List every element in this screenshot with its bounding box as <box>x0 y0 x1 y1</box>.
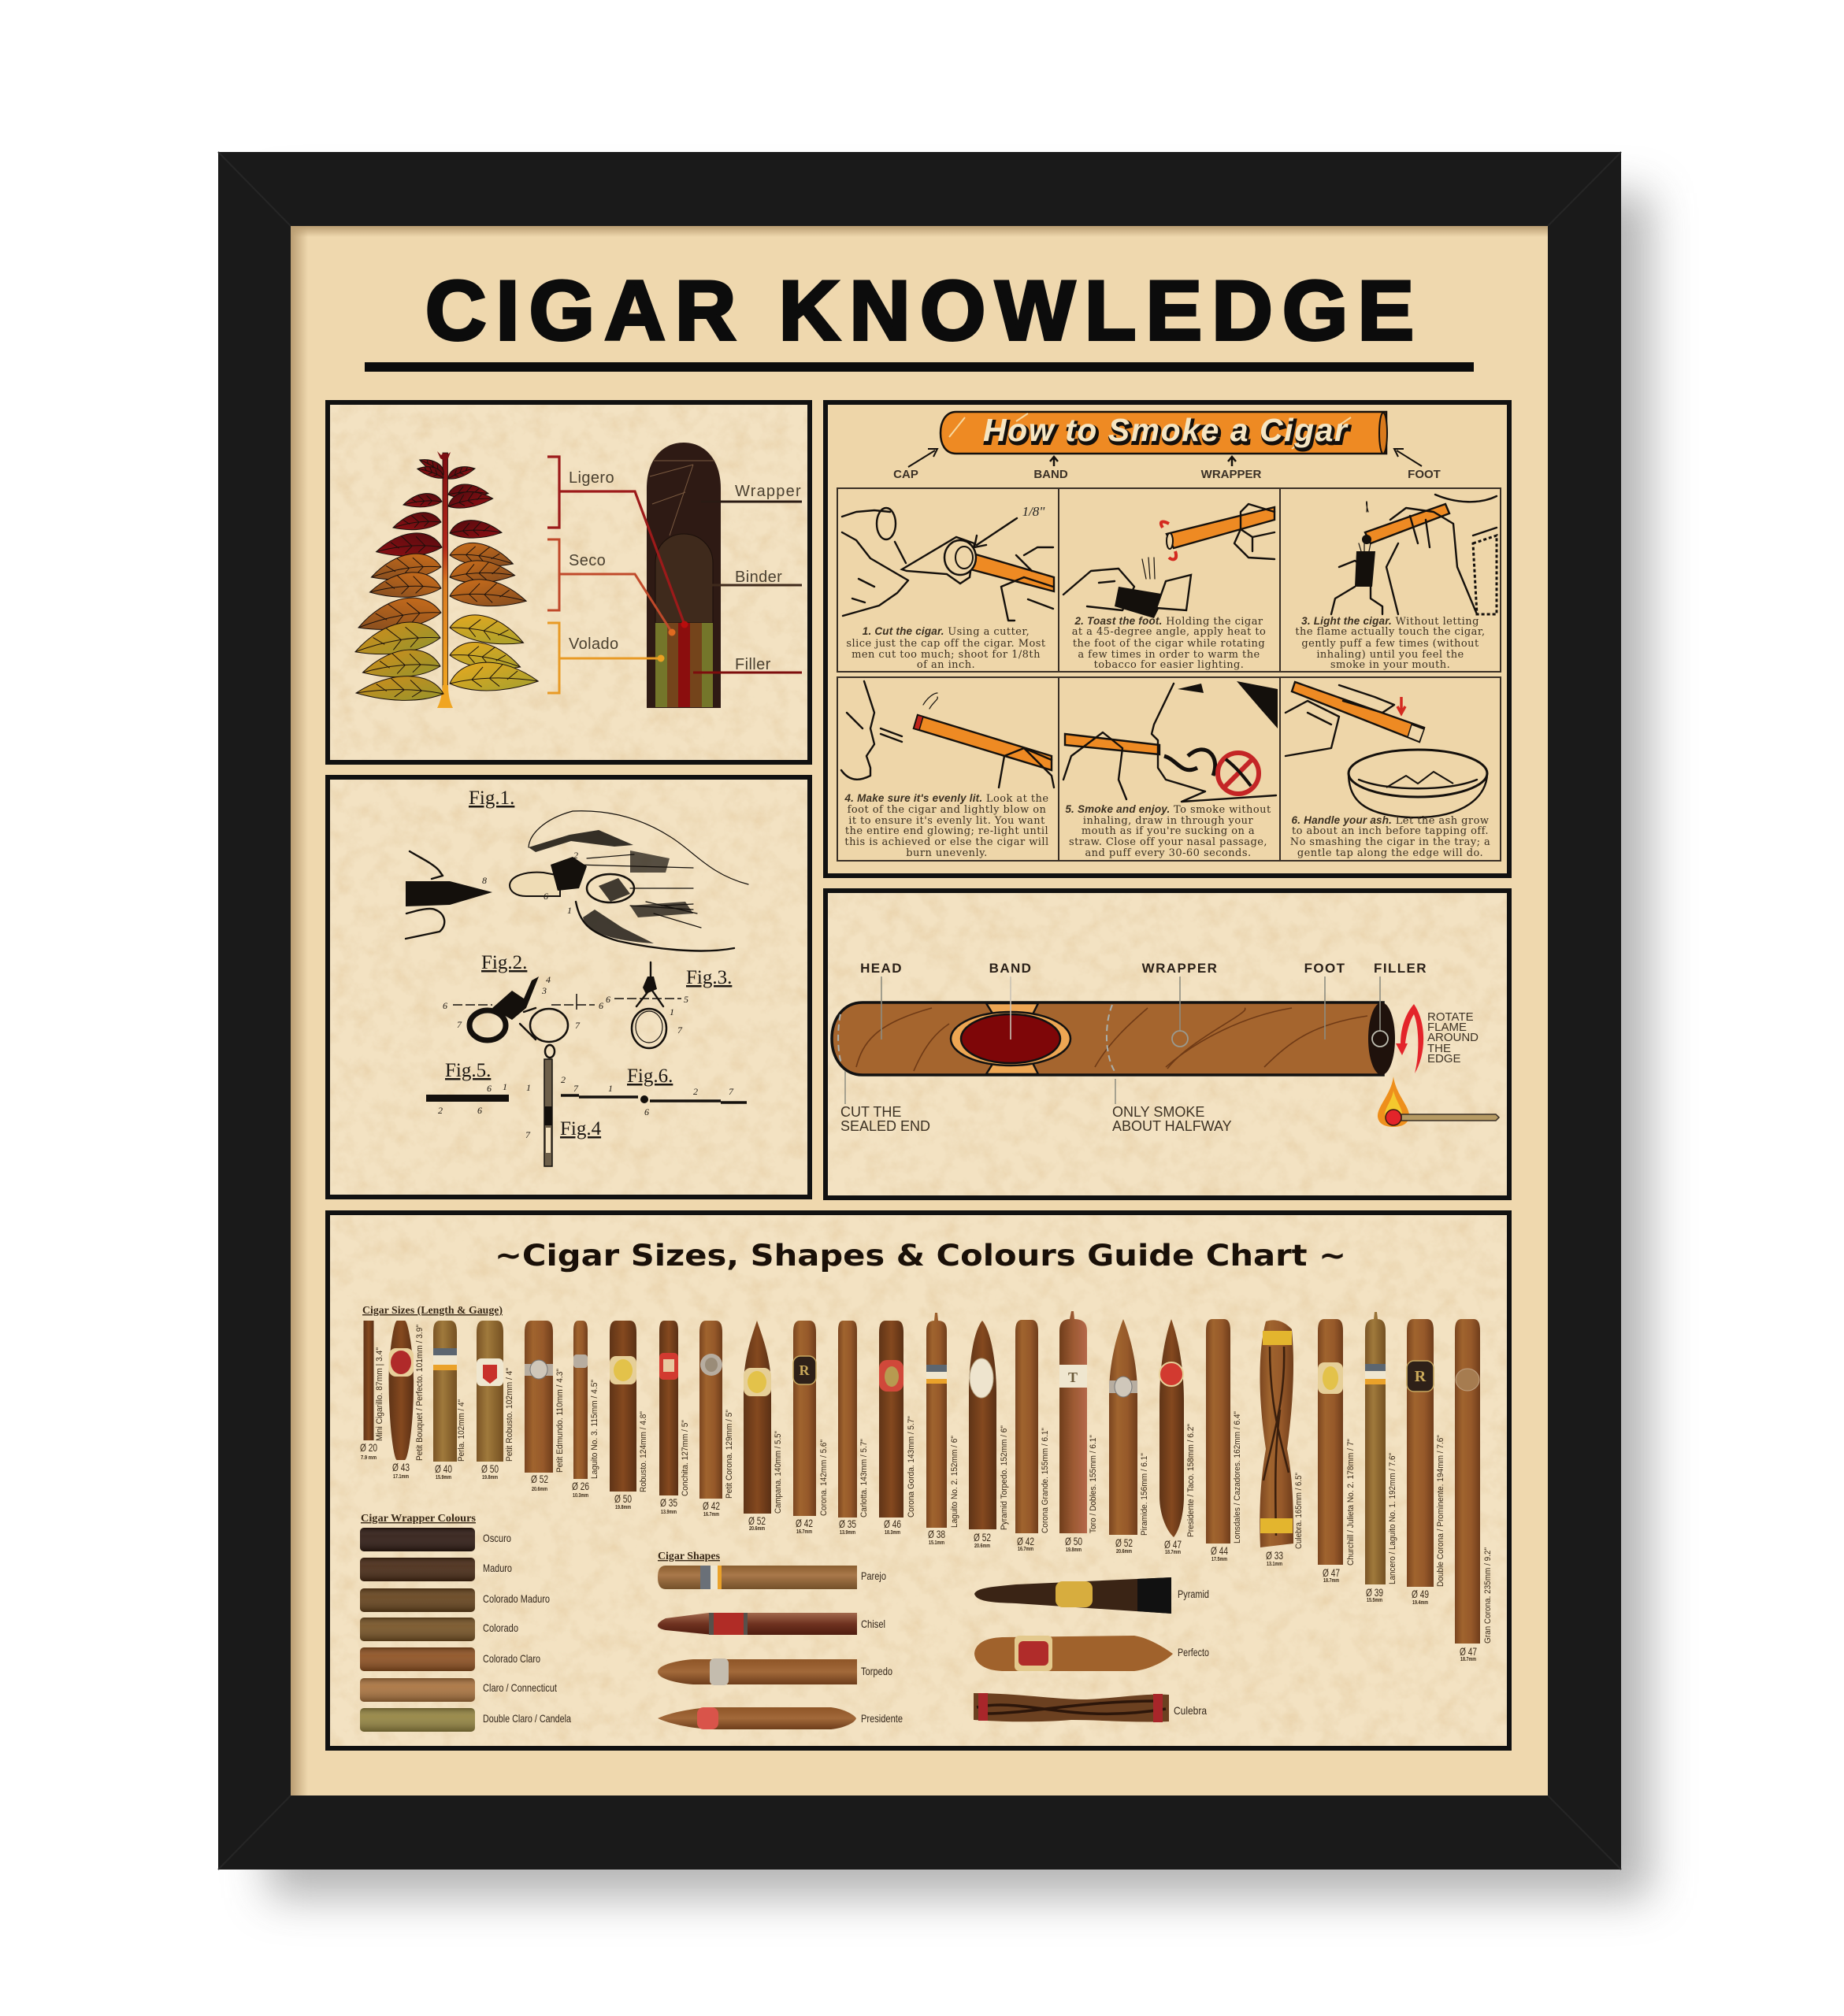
cigar: toro: 19.8mm <box>1066 1547 1082 1553</box>
cigar: toro: Toro / Dobles. 155mm / 6.1" <box>1089 1435 1098 1533</box>
label: wrapper with arrow <box>1201 457 1262 481</box>
cigar: robusto: Robusto. 124mm / 4.8" <box>639 1411 648 1492</box>
shape: pyramid <box>974 1577 1209 1614</box>
cigar: mini cigarillo: 7.9 mm <box>361 1455 377 1461</box>
banner: how to smoke a cigar: How to Smoke a Cigar <box>985 414 1350 450</box>
figure 2: cutter open: 6 <box>443 1000 447 1011</box>
label: Binder: Binder <box>735 569 782 586</box>
cigar: petit robusto: 19.8mm <box>482 1475 498 1480</box>
step 5: smoke and enjoy: mouth as if you're sucking on a <box>1082 825 1255 837</box>
figure 1: hands with cigar and cutter: 2 <box>573 850 578 861</box>
callout: head: HEAD <box>860 961 903 976</box>
figure 2: cutter open: 7 <box>575 1020 581 1031</box>
diagram: cigar body <box>832 1002 1395 1075</box>
bracket: Volado: Volado <box>569 636 619 653</box>
figure 5: cutter section: 6 <box>487 1083 492 1094</box>
shape: parejo <box>658 1566 886 1589</box>
cigar: laguito no. 2: Laguito No. 2. 152mm / 6" <box>950 1436 959 1528</box>
shape: torpedo <box>658 1658 892 1685</box>
cigar: perla: 15.9mm <box>436 1475 451 1480</box>
cigar: lancero <box>1365 1312 1397 1603</box>
cigar: churchill: Churchill / Julieta No. 2. 178mm / 7" <box>1346 1439 1356 1566</box>
figure 6: cutter long section: 7 <box>573 1083 579 1094</box>
figure 5: cutter section <box>426 1060 509 1116</box>
step 6: handle your ash: No smashing the cigar in the tray; a <box>1290 836 1490 848</box>
cigar: pyramid torpedo: Pyramid Torpedo. 152mm / 6" <box>1000 1425 1009 1530</box>
figure 1: hands with cigar and cutter: Fig.1. <box>469 788 514 809</box>
cigar: campana: 20.6mm <box>749 1526 765 1532</box>
cigar: laguito no. 2: 15.1mm <box>929 1540 944 1546</box>
figure 4: cutter edge view: 7 <box>525 1129 531 1140</box>
shape: perfecto <box>974 1636 1209 1671</box>
arrow: rotate flame <box>1396 1004 1479 1073</box>
step 2: toast the foot: tobacco for easier lighting. <box>1094 659 1244 671</box>
label: cap with arrow: CAP <box>893 468 918 481</box>
cigar: culebra: Culebra. 165mm / 6.5" <box>1294 1473 1304 1549</box>
cigar: presidente: 18.7mm <box>1165 1550 1181 1555</box>
figure 6: cutter long section: 7 <box>729 1086 734 1097</box>
cigar: carlotta <box>838 1321 869 1536</box>
cigar: corona grande: Corona Grande. 155mm / 6.1" <box>1041 1428 1050 1533</box>
cigar: campana <box>744 1321 783 1532</box>
cigar: petit corona: 16.7mm <box>703 1512 719 1518</box>
label: cap with arrow <box>893 449 937 481</box>
figure 2: cutter open: 4 <box>546 974 551 985</box>
cigar: piramide: Ø 52 <box>1115 1536 1133 1549</box>
heading: guide chart: ~Cigar Sizes, Shapes & Colours Guide Chart ~ <box>495 1239 1346 1273</box>
cigar: piramide: Piramide. 156mm / 6.1" <box>1140 1453 1149 1536</box>
cigar: petit corona: Ø 42 <box>703 1499 720 1512</box>
panel: cigar sizes, shapes and colours guide chart <box>328 1213 1509 1748</box>
panel: how to smoke a cigar <box>826 402 1509 876</box>
cigar: corona gorda: Ø 46 <box>884 1518 901 1530</box>
step 6: handle your ash <box>1280 677 1501 861</box>
panel: tobacco plant and cigar anatomy <box>328 402 810 762</box>
shape: presidente: Presidente <box>861 1712 903 1725</box>
step 4: make sure it's evenly lit: it to ensure it's evenly lit. You want <box>848 815 1045 827</box>
cigar: corona gorda: Corona Gorda. 143mm / 5.7" <box>907 1416 916 1518</box>
cigar: mini cigarillo <box>360 1321 384 1461</box>
cigar: gran corona: 18.7mm <box>1460 1657 1476 1662</box>
figure 2: cutter open: 3 <box>541 985 547 996</box>
step 4: make sure it's evenly lit: the entire end glowing; re-light until <box>845 825 1048 837</box>
step 3: light the cigar: 3. Light the cigar. Without letting <box>1301 615 1479 628</box>
cigar: piramide: 20.6mm <box>1116 1549 1132 1555</box>
step 5: smoke and enjoy: 5. Smoke and enjoy. To smoke without <box>1065 803 1271 816</box>
swatch: colorado maduro: Colorado Maduro <box>483 1592 550 1605</box>
figure 6: cutter long section <box>561 1065 747 1117</box>
paper mat <box>291 226 1548 1796</box>
cigar: presidente <box>1159 1319 1196 1555</box>
cigar: lonsdales: Lonsdales / Cazadores. 162mm / 6.4" <box>1233 1411 1242 1544</box>
cigar: conchita: 13.9mm <box>661 1510 677 1515</box>
cigar: perla: Perla. 102mm / 4" <box>457 1399 466 1462</box>
figure 6: cutter long section: Fig.6. <box>627 1065 673 1087</box>
figure 5: cutter section: 2 <box>438 1105 443 1116</box>
label: band with arrow <box>1033 457 1068 481</box>
banner: how to smoke a cigar: How to Smoke a Cigar <box>983 412 1349 448</box>
figure 5: cutter section: 6 <box>477 1105 482 1116</box>
swatch: colorado <box>360 1618 518 1641</box>
legend: cigar wrapper colours: Cigar Wrapper Colours <box>361 1513 477 1525</box>
legend: cigar shapes: Cigar Shapes <box>658 1551 721 1562</box>
note: only smoke about halfway: ONLY SMOKE <box>1112 1104 1204 1120</box>
swatch: oscuro <box>360 1528 511 1551</box>
callout: foot: FOOT <box>1304 961 1345 976</box>
cigar: churchill <box>1318 1319 1356 1584</box>
figure 6: cutter long section: 1 <box>608 1083 613 1094</box>
figure 5: cutter section: Fig.5. <box>445 1060 491 1081</box>
cigar: petit edmundo <box>525 1321 565 1492</box>
step 2: toast the foot: the foot of the cigar while rotating <box>1073 638 1265 650</box>
cigar: churchill: Ø 47 <box>1323 1566 1340 1579</box>
label: Binder <box>698 569 802 586</box>
cigar: perla: Ø 40 <box>435 1462 452 1475</box>
cigar: laguito no. 2 <box>926 1313 959 1546</box>
figure 6: cutter long section: 6 <box>644 1106 649 1117</box>
icon: burning match <box>1378 1077 1499 1127</box>
cigar: toro: T <box>1068 1369 1078 1385</box>
arrow: rotate flame: FLAME <box>1427 1021 1467 1034</box>
cigar: double corona: Double Corona / Prominente. 194mm / 7.6" <box>1436 1435 1445 1587</box>
title: CIGAR KNOWLEDGE <box>425 263 1414 358</box>
cigar: petit robusto: Petit Robusto. 102mm / 4" <box>505 1368 514 1462</box>
cigar: culebra: Ø 33 <box>1266 1549 1283 1562</box>
cigar: petit bouquet: 17.1mm <box>393 1474 409 1480</box>
cigar: toro: Ø 50 <box>1065 1535 1082 1547</box>
frame drop shadow <box>268 193 1650 1898</box>
shape: culebra <box>974 1693 1207 1722</box>
step 2: toast the foot: a few times in order to warm the <box>1078 649 1260 661</box>
cigar: lancero: 15.5mm <box>1367 1598 1382 1603</box>
figure 4: cutter edge view: Fig.4 <box>560 1118 602 1140</box>
cigar: culebra <box>1260 1320 1304 1567</box>
cigar: corona gorda: 18.3mm <box>885 1530 900 1536</box>
arrow: rotate flame: AROUND <box>1427 1031 1479 1044</box>
figure 4: cutter edge view: 2 <box>561 1074 566 1085</box>
swatch: claro connecticut: Claro / Connecticut <box>483 1681 557 1694</box>
panel: patent drawings of cigar cutter <box>328 777 810 1197</box>
cigar: mini cigarillo: Mini Cigarillo. 87mm | 3.4" <box>375 1347 384 1441</box>
cigar: petit corona <box>699 1321 734 1518</box>
cigar: lonsdales: Ø 44 <box>1211 1544 1228 1557</box>
cigar: conchita <box>659 1321 690 1515</box>
shape: presidente <box>658 1707 903 1729</box>
cigar: corona grande <box>1015 1320 1050 1552</box>
figure 4: cutter edge view: 1 <box>526 1082 531 1093</box>
cigar: carlotta: Carlotta. 143mm / 5.7" <box>859 1439 869 1518</box>
bracket: Seco: Seco <box>569 552 606 569</box>
cigar: lonsdales <box>1206 1319 1242 1562</box>
cigar: petit robusto <box>477 1321 514 1480</box>
figure 2: cutter open: 7 <box>457 1019 462 1030</box>
cigar: petit robusto: Ø 50 <box>481 1462 499 1475</box>
step 5: smoke and enjoy <box>1059 677 1280 861</box>
swatch: oscuro: Oscuro <box>483 1532 511 1544</box>
black frame <box>218 152 1621 1870</box>
step 4: make sure it's evenly lit: 4. Make sure it's evenly lit. Look at the <box>844 792 1049 805</box>
label: Filler <box>693 656 802 673</box>
cigar: petit bouquet <box>389 1321 425 1480</box>
cigar: corona: R <box>799 1362 810 1378</box>
step 1: cut the cigar: 1/8" <box>1022 504 1045 519</box>
step 1: cut the cigar: slice just the cap off the cigar. Most <box>846 638 1046 650</box>
label: Wrapper <box>701 483 802 502</box>
shape: pyramid: Pyramid <box>1178 1588 1209 1600</box>
step 2: toast the foot: 2. Toast the foot. Holding the cigar <box>1074 615 1263 628</box>
shape: parejo: Parejo <box>861 1569 886 1582</box>
cigar: culebra: 13.1mm <box>1267 1562 1282 1567</box>
cigar: corona grande: 16.7mm <box>1018 1547 1033 1552</box>
cigar: campana: Campana. 140mm / 5.5" <box>774 1431 783 1514</box>
figure 3: cutter closed: 5 <box>684 994 688 1005</box>
step 3: light the cigar: gently puff a few times (without <box>1301 638 1479 650</box>
step 1: cut the cigar <box>837 488 1059 672</box>
cigar: lancero: Ø 39 <box>1366 1586 1383 1599</box>
shape: torpedo: Torpedo <box>861 1665 892 1677</box>
cigar: mini cigarillo: Ø 20 <box>360 1441 377 1454</box>
cigar: pyramid torpedo: Ø 52 <box>974 1531 991 1544</box>
icon: cigar cross section <box>647 443 721 708</box>
figure 3: cutter closed: Fig.3. <box>686 967 732 988</box>
callout: foot <box>1304 961 1345 1040</box>
figure 3: cutter closed: 1 <box>670 1006 674 1017</box>
cigar: corona: Ø 42 <box>796 1517 813 1529</box>
callout: band <box>989 961 1032 1040</box>
cigar: double corona: 19.4mm <box>1412 1600 1428 1606</box>
figure 4: cutter edge view <box>525 1045 602 1166</box>
cigar: toro <box>1059 1311 1098 1553</box>
step 5: smoke and enjoy: inhaling, draw in through your <box>1083 815 1253 827</box>
step 3: light the cigar <box>1280 488 1501 672</box>
figure 2: cutter open <box>443 952 603 1042</box>
cigar: corona: Corona. 142mm / 5.6" <box>819 1440 829 1516</box>
cigar: corona gorda <box>879 1321 916 1536</box>
cigar: carlotta: 13.9mm <box>840 1530 855 1536</box>
cigar: lonsdales: 17.5mm <box>1211 1557 1227 1562</box>
cigar: pyramid torpedo: 20.6mm <box>974 1544 990 1549</box>
swatch: colorado maduro <box>360 1588 550 1612</box>
step 3: light the cigar: the flame actually touch the cigar, <box>1295 626 1486 638</box>
cigar: petit bouquet: Ø 43 <box>392 1461 410 1473</box>
bracket: Seco <box>547 539 676 636</box>
step 6: handle your ash: 6. Handle your ash. Let the ash grow <box>1292 814 1489 827</box>
cigar: robusto <box>610 1321 648 1510</box>
cigar: corona: 16.7mm <box>796 1529 812 1535</box>
shape: perfecto: Perfecto <box>1178 1646 1209 1658</box>
note: only smoke about halfway <box>1112 1079 1232 1134</box>
callout: band: BAND <box>989 961 1032 976</box>
callout: filler <box>1372 961 1427 1047</box>
label: wrapper with arrow: WRAPPER <box>1201 468 1262 481</box>
step 6: handle your ash: to about an inch before tapping off. <box>1292 825 1489 837</box>
cigar: double corona: Ø 49 <box>1412 1588 1429 1600</box>
step 6: handle your ash: gentle tap along the edge will do. <box>1297 847 1483 859</box>
cigar: carlotta: Ø 35 <box>839 1518 856 1530</box>
cigar: laguito no. 2: Ø 38 <box>928 1528 945 1540</box>
cigar: petit edmundo: Petit Edmundo. 110mm / 4.3" <box>555 1369 565 1473</box>
bracket: Volado <box>547 623 665 693</box>
panel: cigar parts and lighting diagram <box>826 891 1509 1198</box>
cigar: laguito no. 3 <box>572 1321 599 1499</box>
arrow: rotate flame: THE <box>1427 1042 1451 1055</box>
note: only smoke about halfway: ABOUT HALFWAY <box>1112 1118 1232 1134</box>
cigar: churchill: 18.7mm <box>1323 1578 1339 1584</box>
cigar: corona <box>793 1321 829 1535</box>
cigar: double corona <box>1407 1319 1445 1606</box>
cigar: pyramid torpedo <box>969 1321 1009 1549</box>
step 3: light the cigar: inhaling) until you feel the <box>1316 649 1464 661</box>
note: cut the sealed end: CUT THE <box>840 1104 901 1120</box>
step 3: light the cigar: smoke in your mouth. <box>1330 659 1450 671</box>
swatch: colorado claro: Colorado Claro <box>483 1652 540 1665</box>
swatch: maduro <box>360 1558 512 1581</box>
cigar: gran corona: Ø 47 <box>1460 1645 1477 1658</box>
legend: cigar wrapper colours <box>360 1513 571 1732</box>
cigar: corona grande: Ø 42 <box>1017 1535 1034 1547</box>
callout: filler: FILLER <box>1374 961 1427 976</box>
step 1: cut the cigar: of an inch. <box>917 659 975 671</box>
figure 1: hands with cigar and cutter <box>406 788 748 951</box>
cigar: campana: Ø 52 <box>748 1514 766 1527</box>
label: Filler: Filler <box>735 656 771 673</box>
figure 3: cutter closed: 7 <box>677 1025 683 1036</box>
band on cigar <box>951 1003 1070 1074</box>
figure 1: hands with cigar and cutter: 6 <box>544 891 548 902</box>
figure 2: cutter open: Fig.2. <box>481 952 527 973</box>
label: foot with arrow <box>1394 449 1441 481</box>
swatch: maduro: Maduro <box>483 1562 512 1574</box>
cigar: petit edmundo: 20.6mm <box>532 1487 547 1492</box>
figure 3: cutter closed <box>606 962 732 1048</box>
swatch: double claro candela <box>360 1708 571 1732</box>
cigar: laguito no. 3: Laguito No. 3. 115mm / 4.5" <box>590 1380 599 1479</box>
cigar: gran corona <box>1455 1319 1493 1662</box>
step 1: cut the cigar: 1. Cut the cigar. Using a cutter, <box>863 625 1030 638</box>
chart: cigar sizes <box>360 1305 1493 1662</box>
callout: wrapper <box>1142 961 1218 1047</box>
step 4: make sure it's evenly lit: burn unevenly. <box>906 847 988 859</box>
cigar: laguito no. 3: 10.3mm <box>573 1493 588 1499</box>
legend: cigar shapes <box>658 1551 1209 1729</box>
step 4: make sure it's evenly lit <box>837 677 1059 861</box>
bracket: Ligero <box>547 457 688 628</box>
callout: wrapper: WRAPPER <box>1142 961 1218 976</box>
cigar: robusto: 19.8mm <box>615 1505 631 1510</box>
cigar: perla <box>433 1321 466 1480</box>
cigar: petit bouquet: Petit Bouquet / Perfecto. 101mm / 3.9" <box>415 1325 425 1461</box>
cigar: presidente: Presidente / Taco. 158mm / 6.2" <box>1186 1424 1196 1537</box>
step 2: toast the foot: at a 45-degree angle, apply heat to <box>1072 626 1266 638</box>
arrow: rotate flame: ROTATE <box>1427 1010 1474 1024</box>
cigar: laguito no. 3: Ø 26 <box>572 1480 589 1492</box>
bracket: Ligero: Ligero <box>569 469 614 487</box>
note: cut the sealed end <box>840 1071 930 1134</box>
cigar: double corona: R <box>1415 1368 1427 1385</box>
step 4: make sure it's evenly lit: foot of the cigar and lightly blow on <box>848 804 1047 816</box>
label: Wrapper: Wrapper <box>735 483 801 500</box>
note: cut the sealed end: SEALED END <box>840 1118 930 1134</box>
figure 5: cutter section: 1 <box>503 1081 507 1092</box>
swatch: double claro candela: Double Claro / Candela <box>483 1712 571 1725</box>
swatch: colorado: Colorado <box>483 1621 518 1634</box>
icon: tobacco plant <box>352 451 539 708</box>
cigar: petit corona: Petit Corona. 129mm / 5" <box>725 1410 734 1499</box>
cigar: piramide <box>1109 1319 1149 1555</box>
cigar: presidente: Ø 47 <box>1164 1538 1182 1551</box>
cigar: robusto: Ø 50 <box>614 1492 632 1505</box>
cigar: gran corona: Gran Corona. 235mm / 9.2" <box>1483 1547 1493 1644</box>
step 5: smoke and enjoy: straw. Close off your nasal passage, <box>1069 836 1267 848</box>
shape: chisel: Chisel <box>861 1618 885 1630</box>
figure 1: hands with cigar and cutter: 8 <box>482 875 487 886</box>
swatch: colorado claro <box>360 1647 540 1671</box>
figure 2: cutter open: 6 <box>599 1000 603 1011</box>
step 1: cut the cigar: men cut too much; shoot for 1/8th <box>852 649 1041 661</box>
shape: culebra: Culebra <box>1174 1704 1207 1717</box>
shape: chisel <box>658 1613 885 1635</box>
step 2: toast the foot <box>1059 488 1280 672</box>
label: band with arrow: BAND <box>1033 468 1068 481</box>
arrow: rotate flame: EDGE <box>1427 1052 1461 1065</box>
cigar: conchita: Ø 35 <box>660 1496 677 1509</box>
figure 3: cutter closed: 6 <box>606 994 610 1005</box>
figure 6: cutter long section: 2 <box>693 1086 698 1097</box>
cigar: lancero: Lancero / Laguito No. 1. 192mm / 7.6" <box>1388 1453 1397 1584</box>
step 5: smoke and enjoy: and puff every 30-60 seconds. <box>1085 847 1252 859</box>
step 4: make sure it's evenly lit: this is achieved or else the cigar will <box>844 836 1049 848</box>
cigar: petit edmundo: Ø 52 <box>531 1473 548 1485</box>
swatch: claro connecticut <box>360 1678 557 1702</box>
figure 1: hands with cigar and cutter: 1 <box>567 905 572 916</box>
callout: head <box>860 961 903 1040</box>
chart: cigar sizes: Cigar Sizes (Length & Gauge) <box>362 1305 503 1317</box>
cigar: conchita: Conchita. 127mm / 5" <box>681 1420 690 1496</box>
label: foot with arrow: FOOT <box>1408 468 1441 481</box>
